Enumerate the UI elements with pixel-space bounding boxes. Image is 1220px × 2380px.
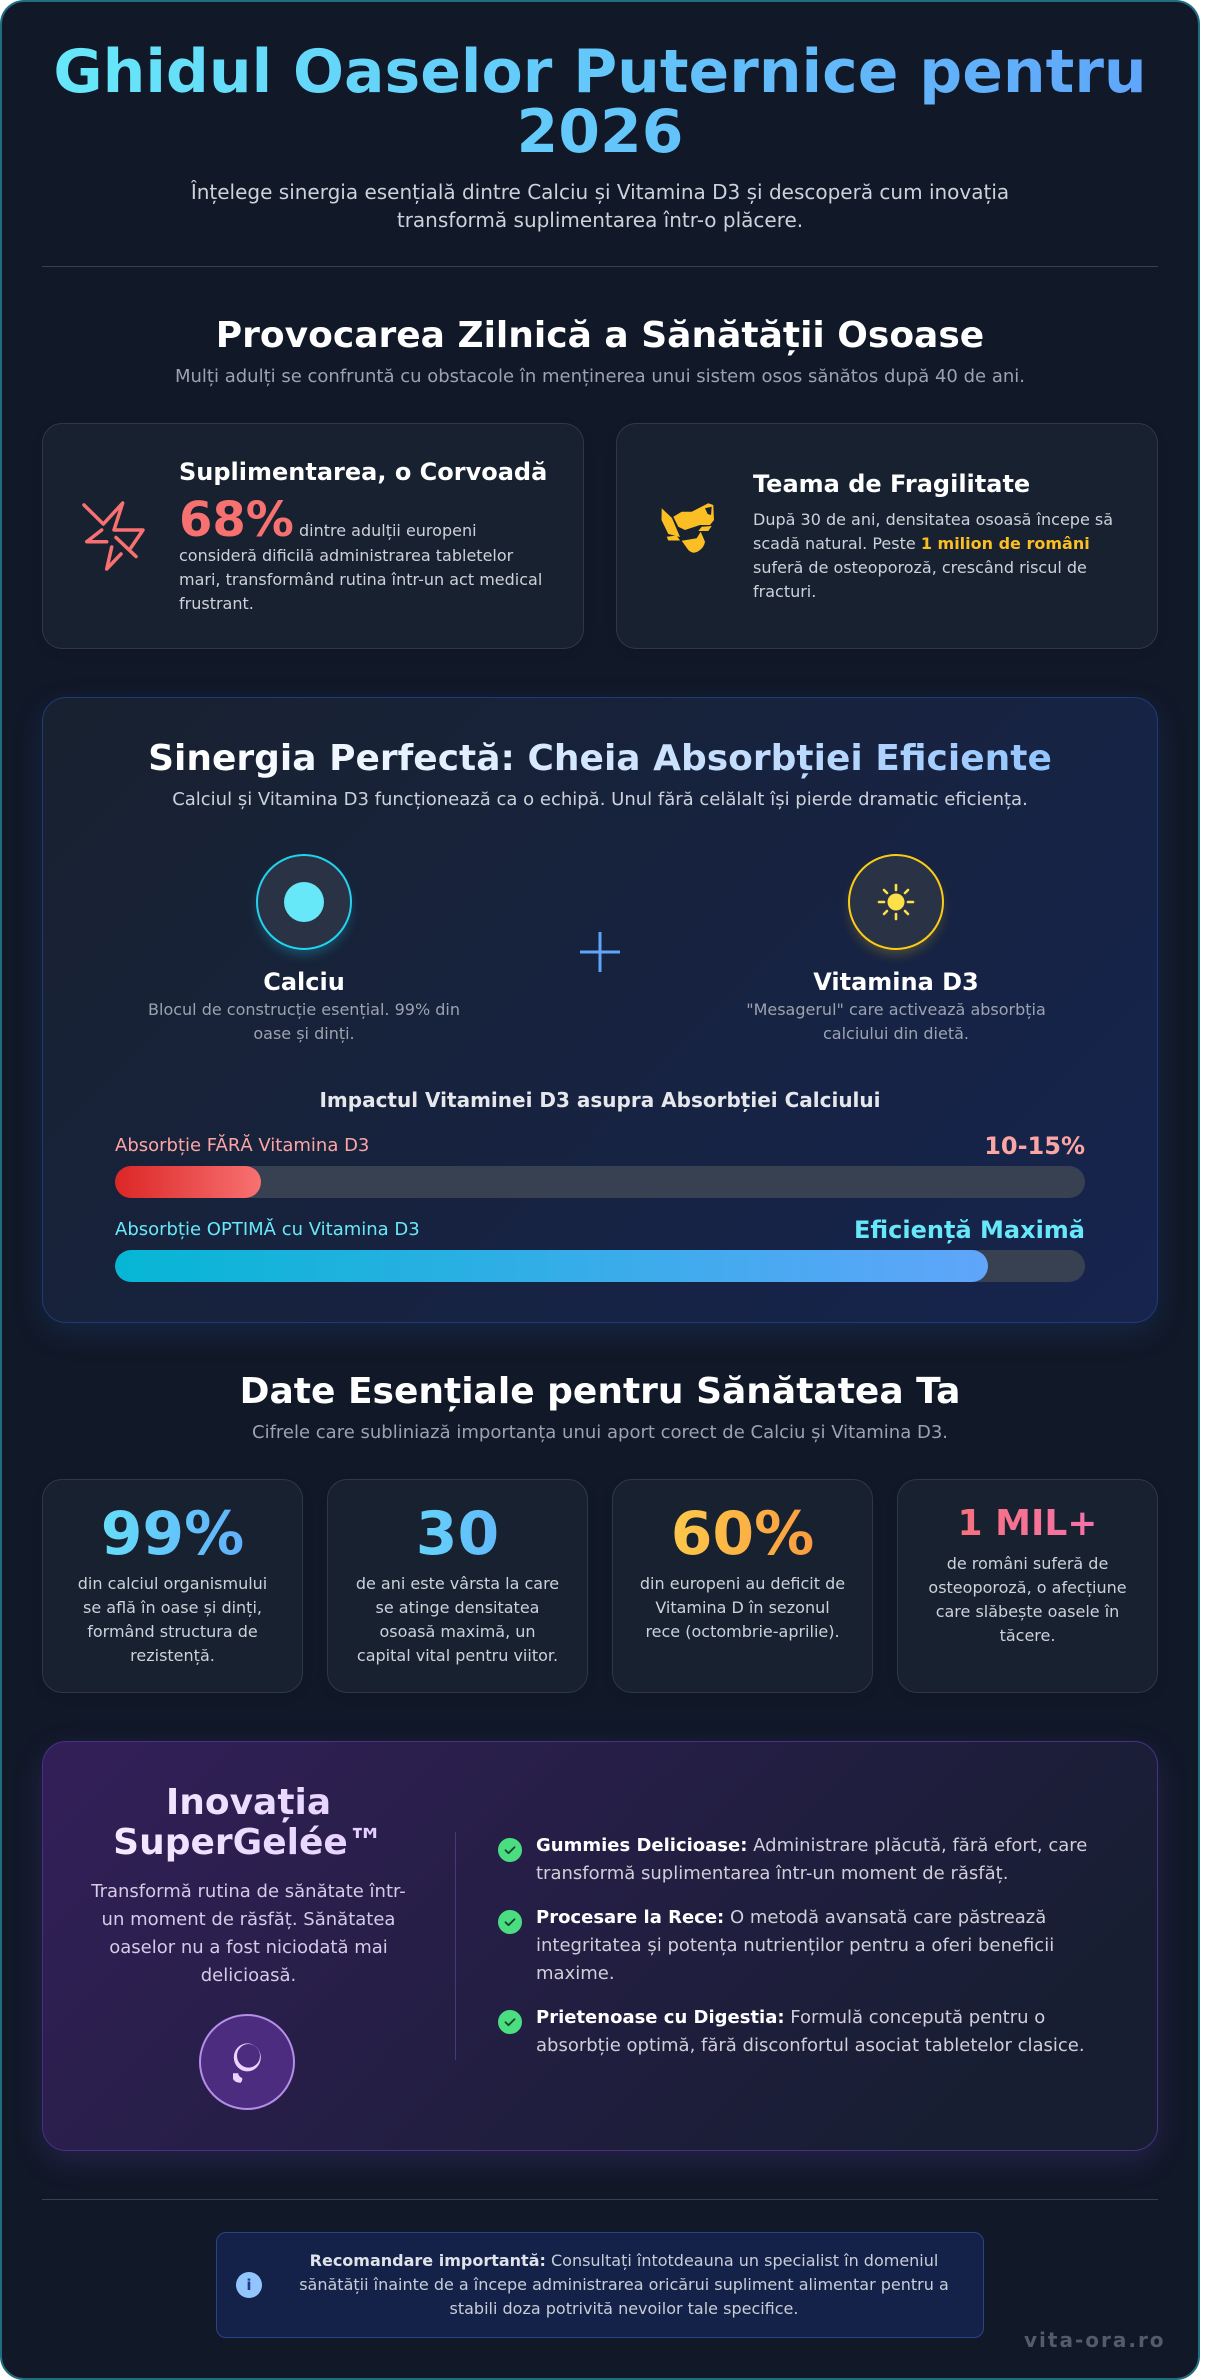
number: 99% — [101, 1499, 244, 1569]
benefit text — [536, 1835, 1087, 1884]
calcium column — [148, 854, 460, 1043]
description: Vitamina D în sezonul — [655, 1598, 830, 1617]
description — [356, 1574, 559, 1665]
vitamin name: Vitamina D3 — [813, 968, 979, 996]
vitamin description: "Mesagerul" care activează absorbția — [746, 1000, 1046, 1019]
stat text 68% — [179, 492, 542, 613]
description: din calciul organismului — [78, 1574, 267, 1593]
icon: check — [498, 2010, 522, 2034]
card heading: Teama de Fragilitate — [753, 470, 1030, 498]
benefit text: integritatea și potența nutrienților pentru a oferi beneficii — [536, 1935, 1054, 1956]
recommendation text — [299, 2251, 949, 2318]
description: formând structura de — [87, 1622, 258, 1641]
icon: sun — [848, 854, 944, 950]
header — [53, 37, 1147, 232]
heading: key data: Date Esențiale pentru Sănătatea Ta — [240, 1371, 960, 1412]
benefit text: transformă suplimentarea într-un moment de răsfăț. — [536, 1863, 1008, 1884]
card body: suferă de osteoporoză, crescând riscul de — [753, 558, 1087, 577]
benefit text: Gummies Delicioase: Administrare plăcută, fără efort, care — [536, 1835, 1087, 1856]
card body — [753, 510, 1113, 601]
number: 1 MIL+ — [958, 1503, 1097, 1544]
icon: info — [236, 2272, 262, 2298]
labels: with d3: Absorbție OPTIMĂ cu Vitamina D3 — [115, 1219, 420, 1240]
benefits list — [455, 1832, 1117, 2060]
panel: fear of fragility — [616, 423, 1158, 649]
recommendation text: sănătății înainte de a începe administrarea oricărui supliment alimentar pentru a — [299, 2275, 949, 2294]
panel: supergelee innovation — [42, 1741, 1158, 2151]
description: de ani este vârsta la care — [356, 1574, 559, 1593]
labels: with d3 — [115, 1216, 1085, 1244]
synergy subtitle: Calciul și Vitamina D3 funcționează ca o echipă. Unul fără celălalt își pierde dramatic eficiența. — [172, 789, 1028, 810]
description: osoasă maximă, un — [379, 1622, 536, 1641]
key data subtitle: Cifrele care subliniază importanța unui aport corect de Calciu și Vitamina D3. — [252, 1422, 948, 1443]
description — [640, 1574, 845, 1641]
vitamin description: calciului din dietă. — [823, 1024, 969, 1043]
icon: info: i — [246, 2276, 252, 2294]
heading: synergy: Sinergia Perfectă: Cheia Absorbției Eficiente — [148, 738, 1052, 779]
description: rece (octombrie-aprilie). — [645, 1622, 840, 1641]
challenge subtitle: Mulți adulți se confruntă cu obstacole în menținerea unui sistem osos sănătos după 40 de ani. — [175, 366, 1025, 387]
description — [928, 1554, 1127, 1645]
number — [352, 1504, 563, 1564]
description: rezistență. — [130, 1646, 215, 1665]
subtitle: Înțelege sinergia esențială dintre Calciu și Vitamina D3 și descoperă cum inovația — [191, 180, 1009, 204]
stat: 99% — [42, 1479, 303, 1693]
innovation title: SuperGelée™ — [113, 1822, 384, 1863]
section: key data — [42, 1371, 1158, 1693]
icon: calcium — [256, 854, 352, 950]
title — [42, 42, 1158, 162]
innovation title — [83, 1783, 414, 1863]
panel: perfect synergy — [42, 697, 1158, 1323]
number: 30 — [416, 1499, 499, 1569]
stat text 68%: mari, transformând rutina într-un act medical — [179, 570, 542, 589]
calcium description: oase și dinți. — [253, 1024, 355, 1043]
stat: 60% — [612, 1479, 873, 1693]
heading: challenge: Provocarea Zilnică a Sănătății Osoase — [216, 315, 984, 356]
description: din europeni au deficit de — [640, 1574, 845, 1593]
vitamin d3 column — [746, 854, 1046, 1043]
stat: 1 mil+ — [897, 1479, 1158, 1693]
description: se află în oase și dinți, — [83, 1598, 262, 1617]
innovation title: Inovația — [166, 1782, 331, 1823]
description: capital vital pentru viitor. — [357, 1646, 558, 1665]
recommendation text: Recomandare importantă: Consultați întotdeauna un specialist în domeniul — [310, 2251, 938, 2270]
icon: broken lightning — [82, 501, 145, 571]
subtitle — [190, 180, 1009, 232]
subtitle: transformă suplimentarea într-o plăcere. — [397, 208, 803, 232]
labels: without d3: Absorbție FĂRĂ Vitamina D3 — [115, 1135, 369, 1156]
challenge cards — [42, 423, 1158, 649]
card body: scadă natural. Peste 1 milion de români — [753, 534, 1090, 553]
card body: După 30 de ani, densitatea osoasă începe să — [753, 510, 1113, 529]
innovation text: oaselor nu a fost niciodată mai — [109, 1937, 388, 1958]
stat text 68%: consideră dificilă administrarea tabletelor — [179, 546, 513, 565]
text: supplement chore — [179, 458, 547, 613]
stat cards — [42, 1479, 1158, 1693]
bar: without d3 — [115, 1166, 1085, 1198]
row: with d3 — [115, 1216, 1085, 1282]
number — [67, 1504, 278, 1564]
benefit text: Prietenoase cu Digestia: Formulă concepută pentru o — [536, 2007, 1045, 2028]
benefit text — [536, 2007, 1085, 2056]
stat text 68%: frustrant. — [179, 594, 254, 613]
description: tăcere. — [1000, 1626, 1055, 1645]
card heading: Suplimentarea, o Corvoadă — [179, 458, 547, 486]
vitamin description — [746, 1000, 1046, 1043]
innovation text: Transformă rutina de sănătate într- — [91, 1881, 406, 1902]
section: daily challenge — [42, 315, 1158, 649]
innovation intro — [91, 1782, 406, 2110]
innovation text: un moment de răsfăț. Sănătatea — [102, 1909, 395, 1930]
icon: check — [498, 1910, 522, 1934]
panel: supplement chore — [42, 423, 584, 649]
number: 60% — [671, 1499, 814, 1569]
watermark: vita-ora.ro — [1024, 2328, 1166, 2352]
labels: with d3: Eficiență Maximă — [854, 1216, 1085, 1244]
calcium name: Calciu — [263, 968, 345, 996]
benefit text: absorbție optimă, fără disconfortul asociat tabletelor clasice. — [536, 2035, 1085, 2056]
benefit: gummies — [498, 1835, 1087, 1884]
card body: fracturi. — [753, 582, 816, 601]
calcium description — [148, 1000, 460, 1043]
description: care slăbește oasele în — [936, 1602, 1119, 1621]
innovation text: delicioasă. — [201, 1965, 296, 1986]
description: osteoporoză, o afecțiune — [928, 1578, 1127, 1597]
number — [637, 1504, 848, 1564]
absorption bar chart — [115, 1088, 1085, 1282]
description: de români suferă de — [947, 1554, 1108, 1573]
innovation text — [91, 1881, 406, 1986]
benefit: digestion — [498, 2007, 1085, 2056]
description: se atinge densitatea — [376, 1598, 539, 1617]
callout: important recommendation — [216, 2232, 984, 2338]
benefit text: maxime. — [536, 1963, 615, 1984]
labels: without d3 — [115, 1132, 1085, 1160]
bar: with d3 — [115, 1250, 1085, 1282]
benefit text — [536, 1907, 1054, 1984]
number — [922, 1504, 1133, 1544]
plus sign — [580, 932, 620, 972]
stat: 30 — [327, 1479, 588, 1693]
title: 2026 — [516, 97, 684, 167]
recommendation text: stabili doza potrivită nevoilor tale specifice. — [450, 2299, 798, 2318]
text: fear of fragility — [753, 470, 1113, 601]
stat text 68%: 68% dintre adulții europeni — [179, 492, 477, 548]
chart title: Impactul Vitaminei D3 asupra Absorbției Calciului — [319, 1088, 881, 1112]
icon: gel drop — [199, 2014, 295, 2110]
calcium plus vitamin diagram — [148, 854, 1046, 1043]
labels: without d3: 10-15% — [984, 1132, 1085, 1160]
benefit: cold processing — [498, 1907, 1054, 1984]
icon: check — [498, 1838, 522, 1862]
benefit text: Procesare la Rece: O metodă avansată care păstrează — [536, 1907, 1046, 1928]
description — [78, 1574, 267, 1665]
row: without d3 — [115, 1132, 1085, 1198]
title: Ghidul Oaselor Puternice pentru — [53, 37, 1147, 107]
icon: fragile bone — [662, 503, 714, 553]
calcium description: Blocul de construcție esențial. 99% din — [148, 1000, 460, 1019]
